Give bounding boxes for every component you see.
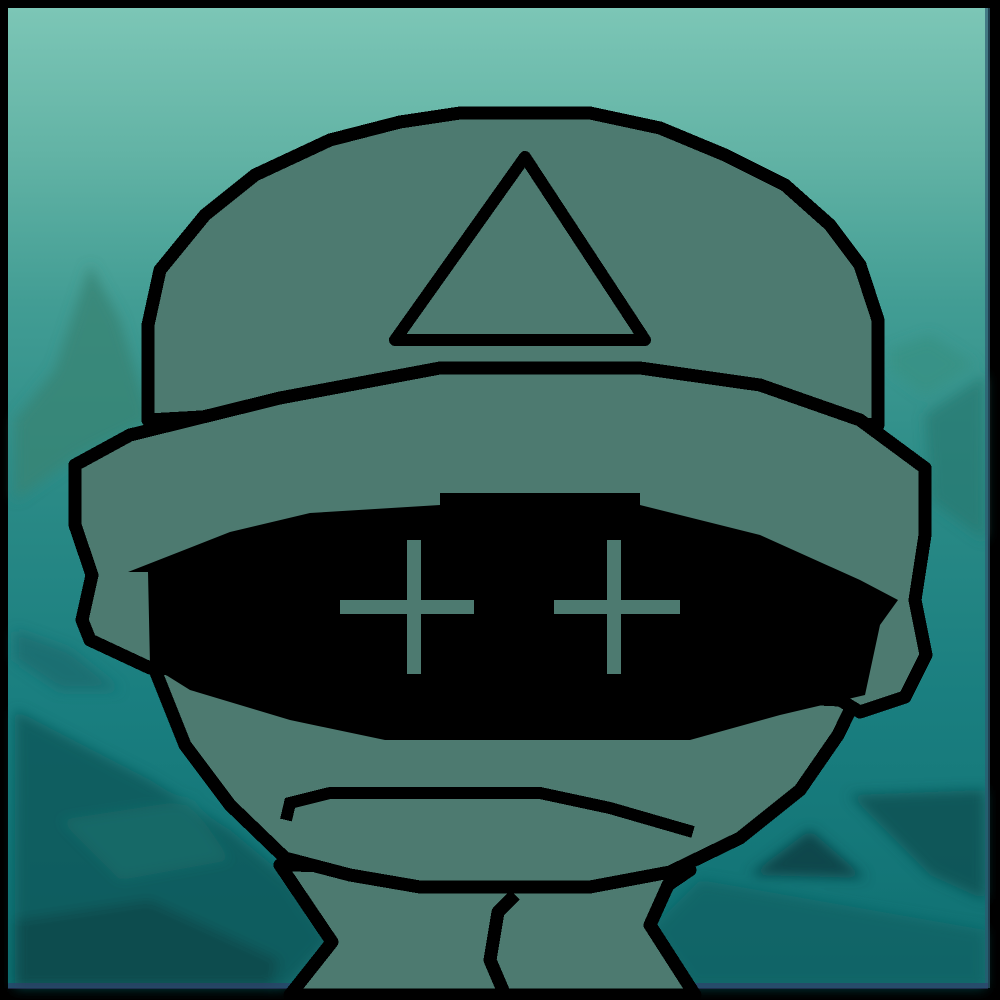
right eye cross: [554, 540, 680, 674]
triangle emblem: [395, 157, 645, 340]
visor: [128, 493, 898, 740]
figure: [75, 113, 926, 995]
neck line: [490, 895, 515, 995]
hat band: [75, 368, 926, 712]
neck: [280, 865, 695, 995]
left eye cross: [340, 540, 474, 674]
hat dome: [148, 113, 878, 425]
face: [150, 600, 860, 887]
mouth: [286, 793, 693, 832]
